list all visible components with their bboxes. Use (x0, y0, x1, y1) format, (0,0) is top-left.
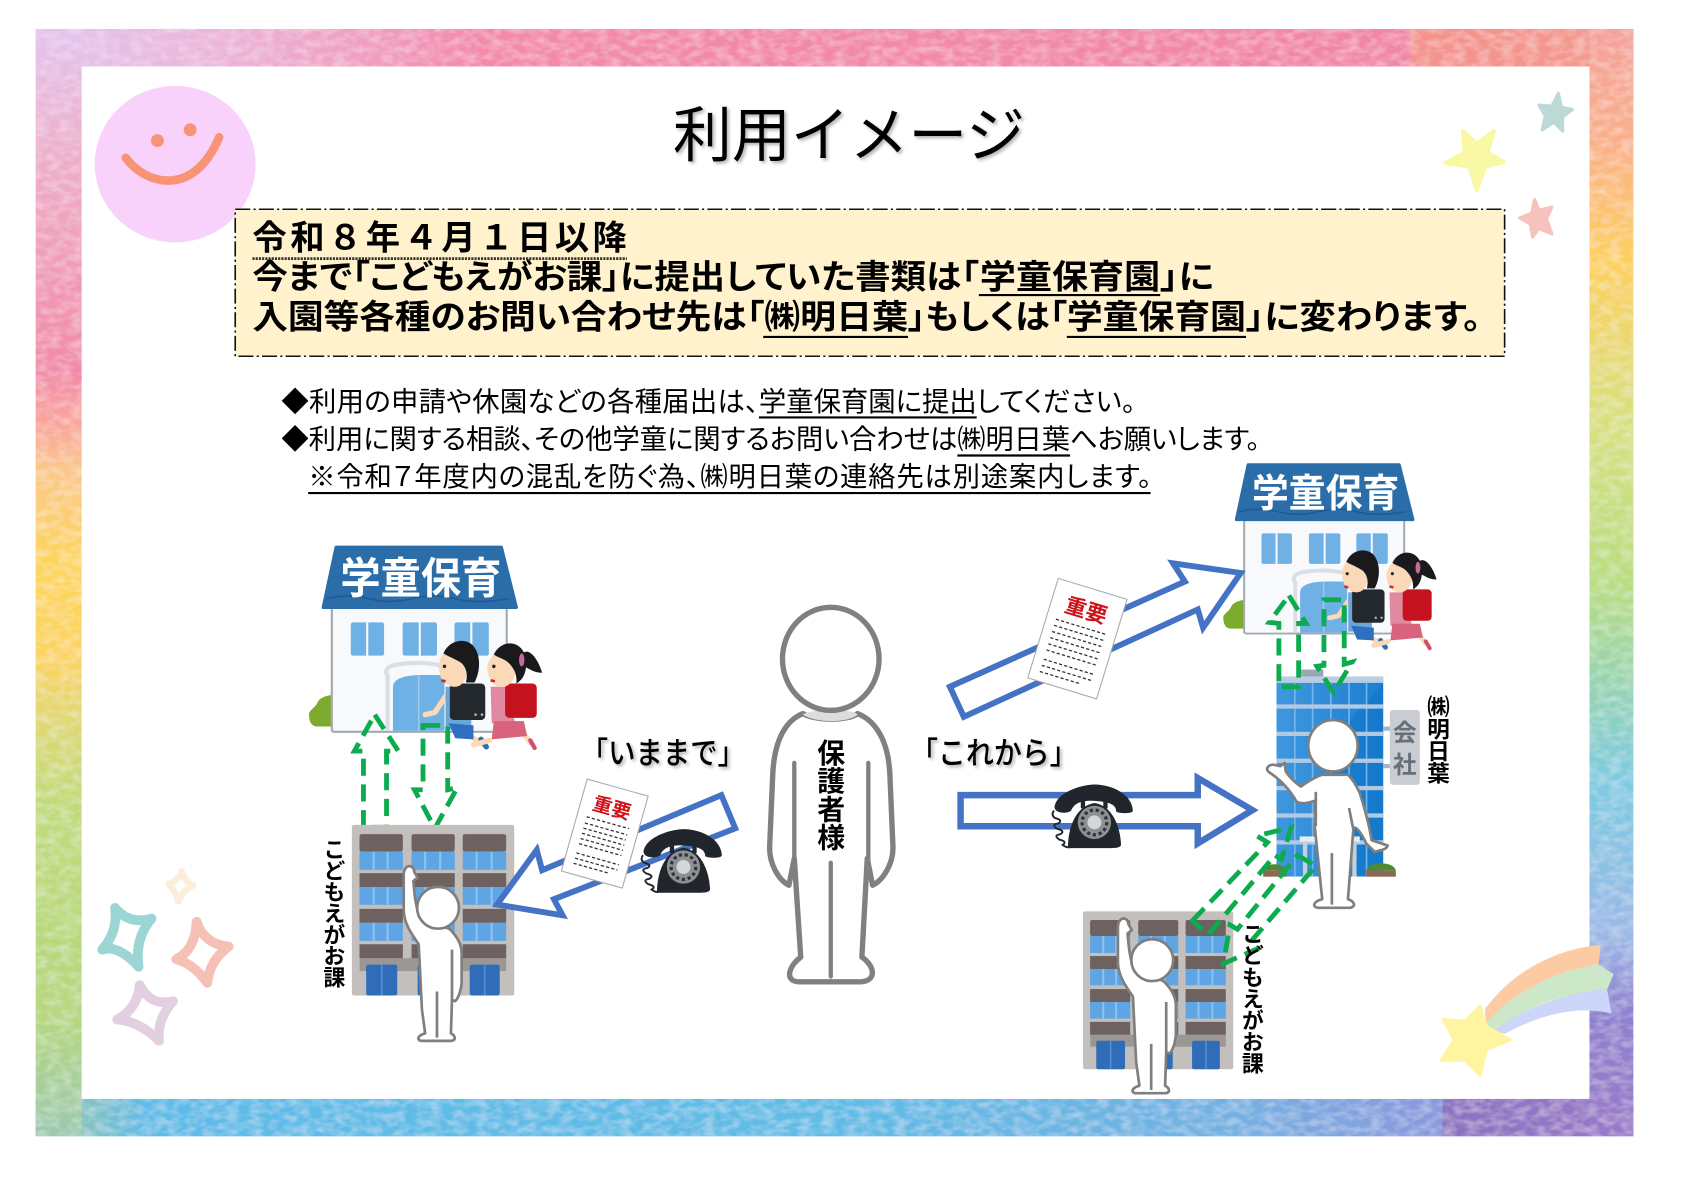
label: 保護者様: 保護者様 (814, 738, 845, 851)
icon: teal star (1539, 93, 1572, 131)
icon: daycare building with children (right): 学童保育 (1252, 472, 1399, 516)
label: これから: 「これから」 (910, 736, 1078, 771)
icon: black telephone (left) (642, 829, 722, 893)
icon: daycare building with children (left) (309, 547, 542, 748)
bullet 1: ◆利用の申請や休園などの各種届出は、 (281, 386, 759, 417)
icon: daycare building with children (left): 学童保育 (340, 555, 501, 603)
notice line 2 (252, 259, 1214, 297)
title: 利用イメージ (673, 103, 1025, 170)
green dashed arrow: up to daycare (left) (354, 715, 398, 827)
bullet 1: してください。 (977, 386, 1136, 417)
figure: staff pointing up (left) (404, 866, 462, 1041)
notice line 2: 」に (1160, 260, 1214, 297)
figure: company staff (1267, 720, 1388, 908)
bullet text block (281, 386, 1260, 493)
icon: daycare building with children (right) (1223, 465, 1437, 648)
icon: company office tower (right) (1263, 670, 1420, 877)
blue arrow: from now, phone to company (961, 778, 1252, 843)
label: いままで: 「いままで」 (581, 736, 745, 771)
notice line 2: 学童保育園 (980, 260, 1160, 297)
blue arrow: until now, guardian to bureau (497, 795, 735, 915)
green dashed arrow: down to company (right) (1317, 600, 1352, 693)
white page panel (82, 67, 1589, 1099)
icon: office building, children's bureau (left) (352, 825, 514, 995)
figure: staff pointing up (right) (1118, 918, 1176, 1093)
icon: office building, children's bureau (right) (1083, 911, 1233, 1069)
icon: black telephone (right) (1053, 784, 1133, 848)
bullet 1 (281, 386, 1136, 417)
bullet 2: ㈱明日葉 (957, 424, 1070, 455)
notice line 3: 入園等各種のお問い合わせ先は「 (252, 299, 764, 336)
notice box (235, 209, 1505, 356)
notice line 3: 学童保育園 (1067, 299, 1246, 336)
bullet 2: ◆利用に関する相談、その他学童に関するお問い合わせは (281, 424, 957, 455)
company sign: 会 (1393, 720, 1417, 747)
notice line 2: 今まで「こどもえがお課」に提出していた書類は「 (252, 259, 979, 297)
bullet 3 note: ※令和７年度内の混乱を防ぐ為、㈱明日葉の連絡先は別途案内します。 (308, 461, 1152, 492)
notice line 3: 」に変わります。 (1245, 299, 1481, 336)
notice line 1: date: 令和８年４月１日以降 (252, 219, 627, 257)
bullet 1: 学童保育園に提出 (759, 386, 977, 417)
label: こどもえがお課 (right): こどもえがお課 (1239, 923, 1264, 1074)
notice line 3: ㈱明日葉 (764, 299, 908, 336)
icon: important document (right): 重要 (1062, 593, 1110, 629)
company sign (1390, 710, 1420, 785)
label: こどもえがお課 (left): こどもえがお課 (320, 838, 345, 989)
green dashed arrow: bureau to company, up (1192, 827, 1291, 935)
green dashed arrow: up to daycare (right) (1269, 596, 1306, 687)
blue arrow: from now, documents to daycare (950, 563, 1241, 717)
label: ㈱明日葉: ㈱明日葉 (1425, 695, 1450, 785)
bullet 2 (281, 424, 1260, 456)
icon: four sparkles (102, 871, 229, 1041)
notice line 3: 」もしくは「 (908, 299, 1067, 336)
green dashed arrow: company to bureau, down (1224, 855, 1316, 964)
company sign: 社 (1393, 752, 1417, 779)
icon: smiley face (95, 86, 256, 243)
icon: rainbow shooting star (1441, 945, 1613, 1075)
icon: important document (right) (1028, 578, 1127, 699)
icon: important document (left): 重要 (590, 793, 633, 824)
figure: guardian (770, 607, 893, 982)
bullet 2: へお願いします。 (1070, 424, 1260, 455)
notice line 3 (252, 299, 1481, 337)
icon: yellow star (1446, 131, 1504, 190)
icon: pink star (1520, 200, 1552, 237)
green dashed arrow: down from daycare (left) (414, 725, 457, 828)
icon: important document (left) (561, 779, 648, 888)
